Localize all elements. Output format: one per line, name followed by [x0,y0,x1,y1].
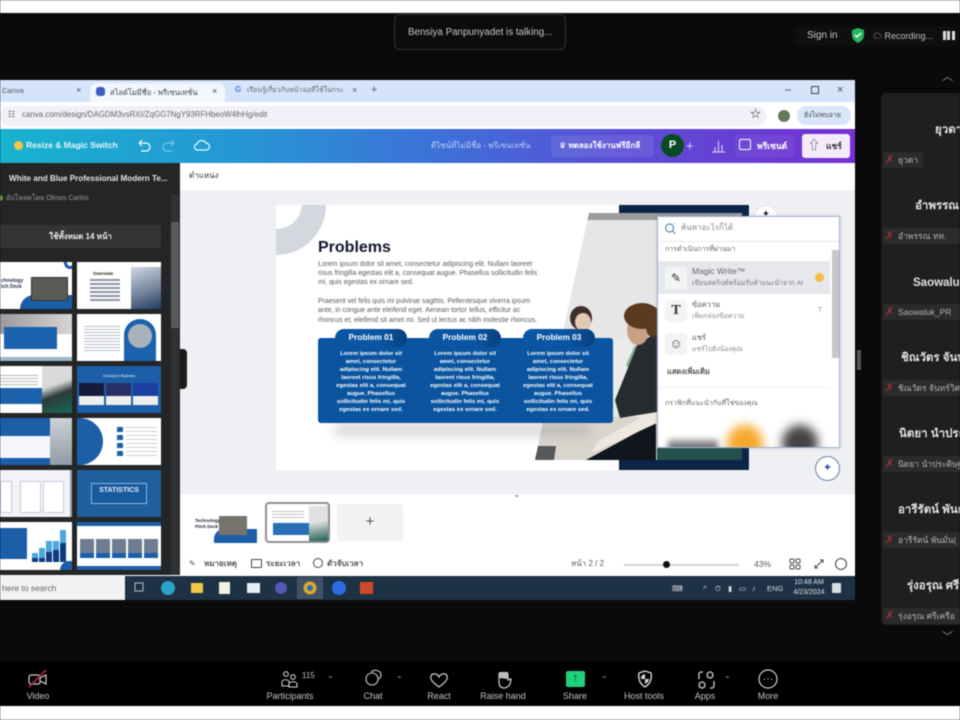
search placeholder: ค้นหาอะไรก็ได้ [681,223,733,232]
text: problem 02: egestas elit a, consequat [430,383,500,389]
page strip [180,494,855,576]
menu: text [666,300,822,322]
template title: White and Blue Professional Modern Te... [9,174,168,183]
magic button behind menu [754,205,778,229]
paragraph one: risus fringilla egestas elit a, consequat augue. Phasellus sollicitudin felis [318,270,537,277]
apply all pages button: ใช้ทั้งหมด 14 หน้า [49,232,112,241]
active tab: × [212,86,217,96]
tab: Problem 01 [335,329,407,347]
text: problem 03: sollicitudin felis mi, quis [524,399,592,405]
text: problem 02: egestas ex ornare sed. [433,407,497,413]
canvas area [180,190,855,494]
menu: share: ☺ [669,336,683,351]
document title: ดีไซน์ที่ไม่มีชื่อ - พรีเซนเทชั่น [431,141,530,150]
page counter: หน้า 2 / 2 [571,559,604,568]
participant count: 115 [302,671,315,680]
apply all pages button [0,225,161,248]
recent actions heading: การดำเนินการที่ผ่านมา [665,246,735,253]
text: problem 02: augue. Phasellus [441,391,489,397]
tab: search: G [235,85,241,94]
system tray: ^ [703,584,707,593]
address bar: canva.com/design/DAGDM3vsRXI/ZqGG7NgY93RFHbeoW4lhHg/edit [22,110,267,119]
address bar: ☆ [750,108,761,120]
participant tag: ยุวดา: ยุวดา [898,155,918,165]
text: problem 03: egestas ex ornare sed. [526,407,590,413]
zoom slider [624,564,739,566]
text: problem 01: Lorem ipsum dolor sit [340,351,402,357]
participant scroll up: ︿ [942,71,953,83]
present button: พรีเซนต์ [757,141,787,151]
text: problem 01: adipiscing elit. Nullam [340,367,402,373]
paragraph two: rhoncus et, eleifend sit amet mi. Sed ut lectus ac nibh molestie rhoncus. [318,317,537,324]
thumb: statistics [77,470,161,517]
paragraph two: Praesent vel felis quis mi pulvinar sagittis. Pellentesque viverra ipsum [318,298,530,305]
thumb: our goals [0,418,72,465]
quick action menu [657,216,840,448]
active tab: สไลด์โมมีชื่อ - พรีเซนเทชั่น [110,88,197,97]
taskbar search box: here to search [2,583,56,593]
talking indicator: Bensiya Panpunyadet is talking... [408,27,552,38]
thumb: introduction [0,314,72,361]
address bar [0,102,855,129]
update button: ยังไม่พบอาย [804,112,841,119]
recording controls [943,31,955,40]
meeting status bar: Sign in [807,30,838,41]
card shadow [335,426,590,434]
host tools icon [637,670,653,688]
participants caret: ⌃ [327,675,334,684]
clock [793,578,825,596]
browser tab strip: × [837,84,843,96]
canvas edge handle [180,349,187,389]
text: problem 03: augue. Phasellus [534,391,582,397]
thumb: marketing strategy [77,418,161,465]
trial button [551,135,654,157]
thumb: concept in business [77,366,161,413]
text: problem 02: adipiscing elit. Nullam [434,367,496,373]
magic assistant button [815,456,840,481]
thumb: overview [77,262,161,309]
system tray: ▭ [739,584,746,593]
icon: security shield [851,27,865,44]
user avatar: P [669,139,676,151]
share icon [566,671,585,687]
text: Apps [695,691,715,701]
thumb: overview: Overview [93,271,113,276]
text: รุ่งอรุณ ศรี [907,580,959,592]
text: problem 01: egestas elit a, consequat [336,383,406,389]
paragraph one: mi, quis egestas ex ornare sed. [318,279,414,286]
text: problem 01: augue. Phasellus [347,391,395,397]
share caret: ⌃ [601,675,608,684]
page thumbnail 1: Pitch Deck [195,524,218,529]
position toolbar: ตำแหน่ง [189,171,218,180]
tab: Problem 02 [429,329,501,347]
tab: Problem 03: Problem 03 [537,332,581,342]
collapse handle: ⌄ [513,489,521,499]
thumb: pitch deck [0,262,72,309]
menu: Magic Write: เขียนสคริปต์พร้อมรับคำแนะนำจาก AI [692,280,803,287]
thumbnail grid [0,261,162,571]
text: problem 02 [430,350,500,413]
more icon [758,668,778,690]
magic button behind menu: ✦ [762,209,770,220]
analytics icon [712,140,726,154]
add page button: + [366,513,374,530]
template side panel: อัปโหลดโดย Olmos Carlos [6,195,89,202]
grid, expand, help icons [788,557,848,571]
woman [570,306,592,330]
magic assistant button: ✦ [823,462,832,474]
text: problem 01 [336,350,406,413]
text: problem 03: egestas elit a, consequat [523,383,593,389]
undo redo save icons [138,139,211,152]
menu: Magic Write: ✎ [671,271,681,285]
text: problem 02: laoreet risus fringilla, [435,375,495,381]
zoom percent: 43% [754,559,771,569]
decorative corner ring [276,204,326,256]
participant tag: อำพรรณ: อำพรรณ ทท. [898,231,946,241]
text: problem 01: sollicitudin felis mi, quis [337,399,405,405]
user avatar [661,134,684,157]
menu: share: แชร์ [692,333,706,342]
stage splitter [857,350,861,370]
navy backdrop [619,205,749,470]
text: problem 02: Lorem ipsum dolor sit [434,351,496,357]
participant tag: นิตยา [883,456,960,472]
browser tab strip: เรียนรู้เกี่ยวกับหน้าจอที่ใช้ในกระ [247,87,344,94]
text: Host tools [624,691,664,701]
menu: share: แชร์ไปยังน้องคุณ [692,346,743,353]
text: More [758,691,778,701]
problem cards panel [317,328,614,440]
menu: Magic Write: Magic Write™ [692,266,745,276]
participant tag: ยุวดา [883,152,923,168]
clock: 10:48 AM [794,579,824,586]
show more: แสดงเพิ่มเติม [667,367,710,376]
text: Raise hand [480,691,526,701]
trial button: ♛ ทดลองใช้งานฟรีอีกลี [559,141,640,150]
thumb: services [0,470,72,517]
system tray: ⌨ [672,584,683,593]
top white band [0,0,960,13]
participant tag: ชิณวัตร [883,380,960,396]
text: problem 02: amet, consectetur [440,359,490,365]
participant tag: ชิณวัตร: ✗ [885,382,894,394]
browser tab strip: + [371,84,377,96]
share button: แชร์ [826,141,842,151]
shared screen [0,80,855,600]
taskbar app icons [134,576,374,600]
text: problem 03 [522,350,594,413]
thumb: statistics: STATISTICS [99,487,139,494]
template side panel [0,163,180,575]
notification icon [832,583,841,593]
browser tab strip: × [352,85,357,95]
text: problem 01: amet, consectetur [346,359,396,365]
participant tag: อารีรัตน์: ✗ [885,534,894,546]
recording label: ☁ Recording... [873,31,933,41]
resize and magic switch [14,141,23,150]
laptop and papers [613,336,639,404]
participant tag: รุ่งอรุณ: ✗ [885,610,894,622]
thumb: concept in business: Concept in Business [103,374,135,378]
canva header: Resize & Magic Switch [26,140,118,150]
duration [251,559,262,568]
talking indicator [394,14,566,50]
bottom white band [0,706,960,720]
bottom meeting toolbar [0,661,960,706]
windows taskbar [0,576,855,600]
window controls: – [785,84,791,96]
participant gallery [881,93,960,625]
slide photo [534,212,743,461]
text: problem 02: sollicitudin felis mi, quis [431,399,499,405]
notes: ✎ [189,559,196,568]
present button [735,135,795,157]
apps caret: ⌃ [724,675,731,684]
page thumbnail 2 [265,502,330,543]
system tray: ♪ [752,584,756,593]
tab: Canva: Canva [2,86,24,95]
browser tab strip: × [76,85,81,95]
system tray: ⏱ [715,584,721,593]
chat caret: ⌃ [396,675,403,684]
participant scroll down: ﹀ [942,631,953,643]
menu: text: เพิ่มกล่องข้อความ [692,313,744,320]
text: Chat [363,691,382,701]
menu: text: T [818,307,822,314]
profile avatar [778,110,790,122]
tab: Problem 02: Problem 02 [443,332,487,342]
participant tag: นิตยา: ✗ [885,458,894,470]
text: Participants [266,691,314,701]
text: problem 03: adipiscing elit. Nullam [527,367,589,373]
page strip: หมายเหตุ [204,559,237,568]
thumb: problems [0,366,72,413]
participant tag: ชิณวัตร: ชิณวัตร จันทร์วิศ [898,383,960,393]
participant tag: Saowaluk [883,304,960,320]
address bar: ☷ [8,110,15,119]
slide [276,205,750,470]
raise hand icon [498,671,512,690]
man [615,333,657,418]
participant tag: ยุวดา: ✗ [885,154,894,166]
page strip: ระยะเวลา [266,559,300,568]
position toolbar [180,163,855,190]
menu: text: T [671,303,681,318]
share button [802,134,850,158]
paragraph two: ante, in congue ante eleifend eget. Aenean tortor tellus, efficitur ac [318,307,520,314]
participant tag: อำพรรณ [883,228,960,244]
menu: share [666,333,743,354]
participant tag: Saowaluk: Saowaluk_PR [898,307,951,317]
blue card [318,338,613,423]
menu: Magic Write [658,261,830,294]
page strip: ตัวจับเวลา [327,559,363,568]
react icon [429,672,449,688]
participant tag: อารีรัตน์: อารีรัตน์ พันมั่น( [898,535,956,545]
heading: Problems: Problems [318,239,391,256]
system tray: ▮ [728,584,732,593]
text: problem 03: Lorem ipsum dolor sit [527,351,589,357]
system tray [672,584,784,593]
tab: Problem 01: Problem 01 [349,332,393,342]
paragraph one: Lorem ipsum dolor sit amet, consectetur adipiscing elit. Nullam laoreet [318,261,532,268]
search icon [664,222,676,235]
paragraph two [318,297,537,324]
taskbar search box [0,576,125,600]
text: Share [563,691,587,701]
participant tag: อำพรรณ: ✗ [885,230,894,242]
thumb: pitch deck: tch Deck [1,284,22,290]
text: problem 01: laoreet risus fringilla, [341,375,401,381]
text: React [427,691,451,701]
text: problem 03: amet, consectetur [533,359,583,365]
clock: 4/23/2024 [793,589,825,596]
timer [313,558,323,568]
system tray: ENG [767,584,783,593]
text: problem 01: egestas ex ornare sed. [339,407,403,413]
share button: ⇧ [808,138,820,152]
text: problem 03: laoreet risus fringilla, [528,375,588,381]
blurred graphics [668,439,718,452]
tab: Problem 03 [523,329,595,347]
chat icon [364,669,382,686]
template author [0,195,3,201]
toolbar labels: Video [27,691,49,701]
participant tag: รุ่งอรุณ [883,608,960,624]
meeting status bar [795,26,960,46]
participant tag: รุ่งอรุณ: รุ่งอรุณ ศรีเครือ [898,611,955,621]
thumb: team [77,522,161,570]
menu: text: ข้อความ [692,300,720,309]
participant tag: อารีรัตน์ [883,532,960,548]
update button [797,106,851,125]
paragraph one [318,260,538,286]
menu scrollbar [832,250,839,358]
share icon: ↑ [573,672,578,684]
thumb: chart [0,522,72,570]
thumb: about us [77,314,161,361]
participants icon [280,670,298,688]
panel scrollbar [171,194,179,575]
page thumbnail 1 [190,504,257,543]
canva header: + [686,138,694,153]
active tab [90,83,225,102]
thumb: pitch deck: chnology [1,278,23,284]
apps icon [698,670,716,690]
page thumbnail 1: Technology [195,518,220,523]
browser tab strip [0,80,855,102]
video off icon [28,669,48,688]
canva header [0,129,855,163]
participant tag: Saowaluk: ✗ [885,306,894,318]
graphics heading: กราฟิกที่แนะนำกันที่ใช่ของคุณ [665,400,758,407]
add page button [337,504,403,541]
